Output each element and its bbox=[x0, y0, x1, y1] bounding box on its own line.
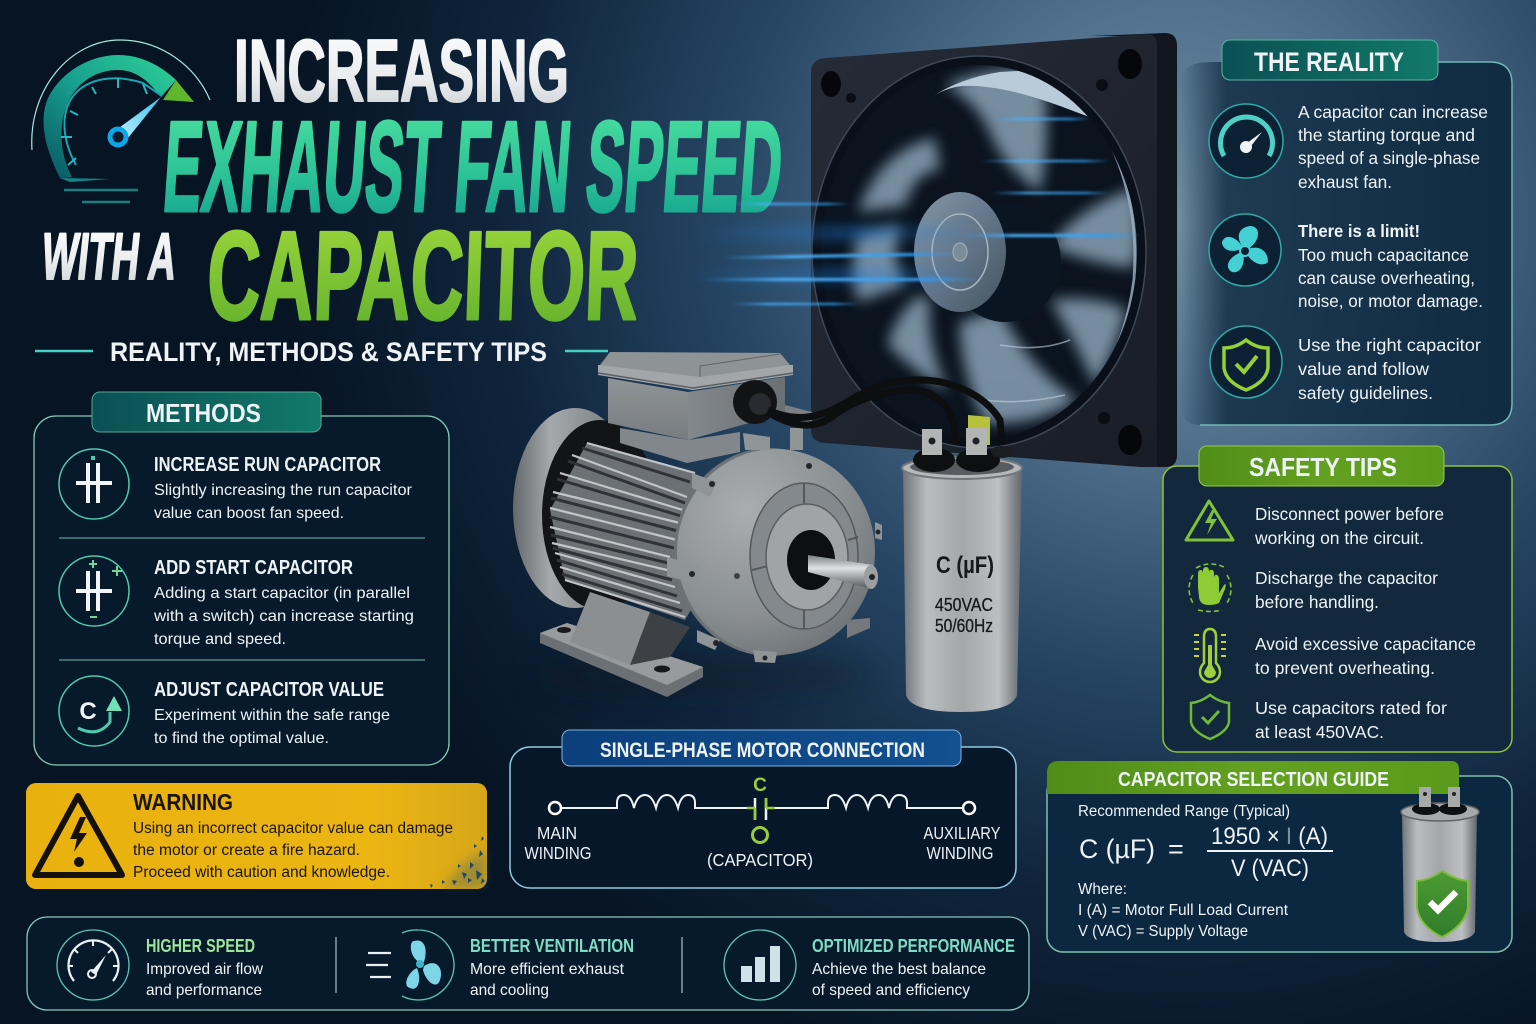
panel: the reality bbox=[1180, 40, 1512, 425]
text: add start capacitor: Adding a start capacitor (in parallel bbox=[154, 585, 410, 602]
icon: start capacitor bbox=[59, 556, 129, 626]
illustration: capacitor: C (µF) bbox=[936, 552, 994, 579]
text: adjust capacitor value bbox=[154, 679, 390, 747]
air flow streaks bbox=[690, 118, 1140, 305]
text: warning: Proceed with caution and knowledge. bbox=[133, 864, 390, 881]
fan blades bbox=[853, 70, 1138, 423]
text: higher speed: and performance bbox=[146, 982, 262, 999]
text: add start capacitor: ADD START CAPACITOR bbox=[154, 557, 353, 579]
icon: electric hazard bbox=[1186, 501, 1233, 540]
tab: safety tips: SAFETY TIPS bbox=[1249, 452, 1397, 482]
text: reality 1 bbox=[1298, 102, 1488, 192]
labels: windings: AUXILIARY bbox=[924, 823, 1001, 843]
labels: windings: MAIN bbox=[537, 823, 577, 843]
text: reality 1: A capacitor can increase bbox=[1298, 102, 1488, 122]
text: better ventilation: and cooling bbox=[470, 982, 549, 999]
text: add start capacitor: torque and speed. bbox=[154, 631, 286, 648]
icon: speedometer bbox=[32, 40, 210, 202]
icon: hand discharge bbox=[1189, 564, 1231, 612]
text: higher speed: HIGHER SPEED bbox=[146, 936, 255, 956]
icon: performance bars bbox=[724, 930, 796, 1000]
text: reality 2 bbox=[1298, 221, 1483, 311]
text: formula: C (µF) bbox=[1079, 834, 1155, 864]
text: formula bbox=[1078, 803, 1333, 940]
rear end bell bbox=[513, 408, 637, 608]
tab: connection heading bbox=[562, 730, 961, 766]
text: warning: the motor or create a fire hazard. bbox=[133, 842, 360, 859]
text: reality 2: There is a limit! bbox=[1298, 221, 1420, 241]
text: tip 4: Use capacitors rated for bbox=[1255, 698, 1447, 718]
illustration: electric motor bbox=[513, 352, 1002, 697]
text: tip 2: Discharge the capacitor bbox=[1255, 568, 1438, 588]
illustration: exhaust fan bbox=[811, 33, 1177, 467]
text: formula: V (VAC) = Supply Voltage bbox=[1078, 923, 1248, 940]
text: tip 1: working on the circuit. bbox=[1254, 528, 1424, 548]
subtitle: REALITY, METHODS & SAFETY TIPS bbox=[110, 337, 547, 367]
text: tip 4: at least 450VAC. bbox=[1255, 722, 1384, 742]
cables bbox=[768, 380, 1002, 444]
labels: windings: WINDING bbox=[926, 843, 994, 863]
panel: capacitor selection guide bbox=[1047, 761, 1512, 952]
front housing bbox=[674, 448, 866, 656]
callout: warning bbox=[26, 783, 487, 889]
text: better ventilation bbox=[470, 936, 634, 999]
text: formula: Recommended Range (Typical) bbox=[1078, 803, 1290, 820]
mounting lugs bbox=[667, 428, 882, 663]
title: CAPACITOR bbox=[205, 205, 641, 346]
text: increase run capacitor: Slightly increasing the run capacitor bbox=[154, 482, 413, 499]
tab: guide heading bbox=[1047, 761, 1459, 794]
text: reality 3 bbox=[1298, 335, 1481, 403]
tab: the reality bbox=[1222, 40, 1438, 80]
text: reality 2: noise, or motor damage. bbox=[1298, 291, 1483, 311]
text: formula: I (A) = Motor Full Load Current bbox=[1078, 902, 1289, 919]
text: add start capacitor bbox=[153, 557, 414, 648]
labels: windings: WINDING bbox=[524, 843, 592, 863]
text: warning: Using an incorrect capacitor value can damage bbox=[133, 820, 453, 837]
text: reality 3: Use the right capacitor bbox=[1298, 335, 1481, 355]
motor base feet bbox=[847, 618, 870, 638]
labels: windings: (CAPACITOR) bbox=[707, 850, 813, 870]
text: tip 1: Disconnect power before bbox=[1255, 504, 1444, 524]
icon: capacitor with shield bbox=[1401, 787, 1479, 942]
text: tip 3 bbox=[1255, 634, 1476, 678]
text: increase run capacitor bbox=[154, 454, 413, 522]
icon: shield check bbox=[1210, 326, 1282, 398]
circuit diagram bbox=[549, 775, 975, 842]
icon: fan bbox=[1209, 214, 1281, 286]
text: reality 2: can cause overheating, bbox=[1298, 268, 1475, 288]
text: increase run capacitor: value can boost fan speed. bbox=[154, 505, 344, 522]
tab: guide heading: CAPACITOR SELECTION GUIDE bbox=[1118, 768, 1389, 791]
panel: safety tips bbox=[1163, 446, 1512, 752]
text: reality 1: the starting torque and bbox=[1298, 125, 1475, 145]
icon: adjust capacitor: C bbox=[79, 698, 97, 725]
text: optimized performance: OPTIMIZED PERFORMANCE bbox=[812, 936, 1015, 956]
panel: benefits bar bbox=[27, 917, 1029, 1010]
terminal box bbox=[620, 428, 740, 463]
tab: methods bbox=[92, 392, 321, 432]
text: reality 1: speed of a single-phase bbox=[1298, 148, 1480, 168]
text: tip 4 bbox=[1255, 698, 1447, 742]
icon: run capacitor bbox=[59, 449, 129, 519]
text: higher speed: Improved air flow bbox=[146, 961, 263, 978]
text: increase run capacitor: INCREASE RUN CAPACITOR bbox=[154, 454, 381, 476]
text: tip 3: to prevent overheating. bbox=[1255, 658, 1435, 678]
icon: ventilation fan bbox=[366, 930, 454, 1000]
text: optimized performance: Achieve the best balance bbox=[812, 961, 986, 978]
icon: thermometer bbox=[1194, 629, 1226, 682]
icon: gauge bbox=[1209, 104, 1283, 178]
tab: safety tips bbox=[1199, 446, 1444, 486]
text: optimized performance: of speed and efficiency bbox=[812, 982, 970, 999]
text: reality 2: Too much capacitance bbox=[1298, 245, 1469, 265]
text: reality 3: value and follow bbox=[1298, 359, 1429, 379]
illustration: capacitor bbox=[902, 415, 1022, 712]
title: WITH A bbox=[38, 220, 180, 294]
illustration: capacitor: 50/60Hz bbox=[935, 616, 993, 636]
icon: higher speed gauge bbox=[57, 930, 129, 1000]
tab: the reality: THE REALITY bbox=[1254, 47, 1404, 77]
text: formula: = bbox=[1168, 834, 1184, 864]
text: formula: 1950 × I (A) bbox=[1211, 823, 1328, 850]
text: formula: V (VAC) bbox=[1231, 855, 1309, 882]
text: reality 1: exhaust fan. bbox=[1298, 172, 1392, 192]
text: tip 2 bbox=[1255, 568, 1438, 612]
panel: single-phase motor connection bbox=[510, 730, 1016, 888]
labels: windings bbox=[524, 823, 1001, 870]
icon: shield bbox=[1191, 695, 1229, 739]
text: better ventilation: BETTER VENTILATION bbox=[470, 936, 634, 956]
text: tip 1 bbox=[1254, 504, 1444, 548]
text: better ventilation: More efficient exhaust bbox=[470, 961, 625, 978]
text: adjust capacitor value: ADJUST CAPACITOR VALUE bbox=[154, 679, 384, 701]
text: tip 2: before handling. bbox=[1255, 592, 1379, 612]
tab: connection heading: SINGLE-PHASE MOTOR CONNECTION bbox=[600, 739, 925, 762]
tab: methods: METHODS bbox=[146, 398, 261, 428]
text: reality 3: safety guidelines. bbox=[1298, 383, 1433, 403]
text: warning bbox=[133, 789, 453, 881]
text: adjust capacitor value: Experiment within the safe range bbox=[154, 707, 390, 724]
text: optimized performance bbox=[812, 936, 1015, 999]
title bbox=[38, 21, 787, 346]
text: add start capacitor: with a switch) can increase starting bbox=[153, 608, 414, 625]
cable gland bbox=[733, 380, 777, 424]
text: EXHAUST FAN SPEED bbox=[159, 95, 787, 239]
icon: warning triangle bbox=[35, 796, 122, 875]
text: adjust capacitor value: to find the optimal value. bbox=[154, 730, 329, 747]
title: INCREASING bbox=[234, 21, 569, 120]
panel: methods bbox=[34, 392, 449, 765]
text: tip 3: Avoid excessive capacitance bbox=[1255, 634, 1476, 654]
circuit diagram: C bbox=[753, 775, 767, 796]
text: higher speed bbox=[146, 936, 263, 999]
illustration: capacitor: 450VAC bbox=[935, 595, 993, 615]
text: formula: Where: bbox=[1078, 881, 1127, 898]
icon: adjust capacitor bbox=[59, 676, 129, 746]
cooling fin body bbox=[550, 443, 720, 620]
text: warning: WARNING bbox=[133, 789, 233, 815]
